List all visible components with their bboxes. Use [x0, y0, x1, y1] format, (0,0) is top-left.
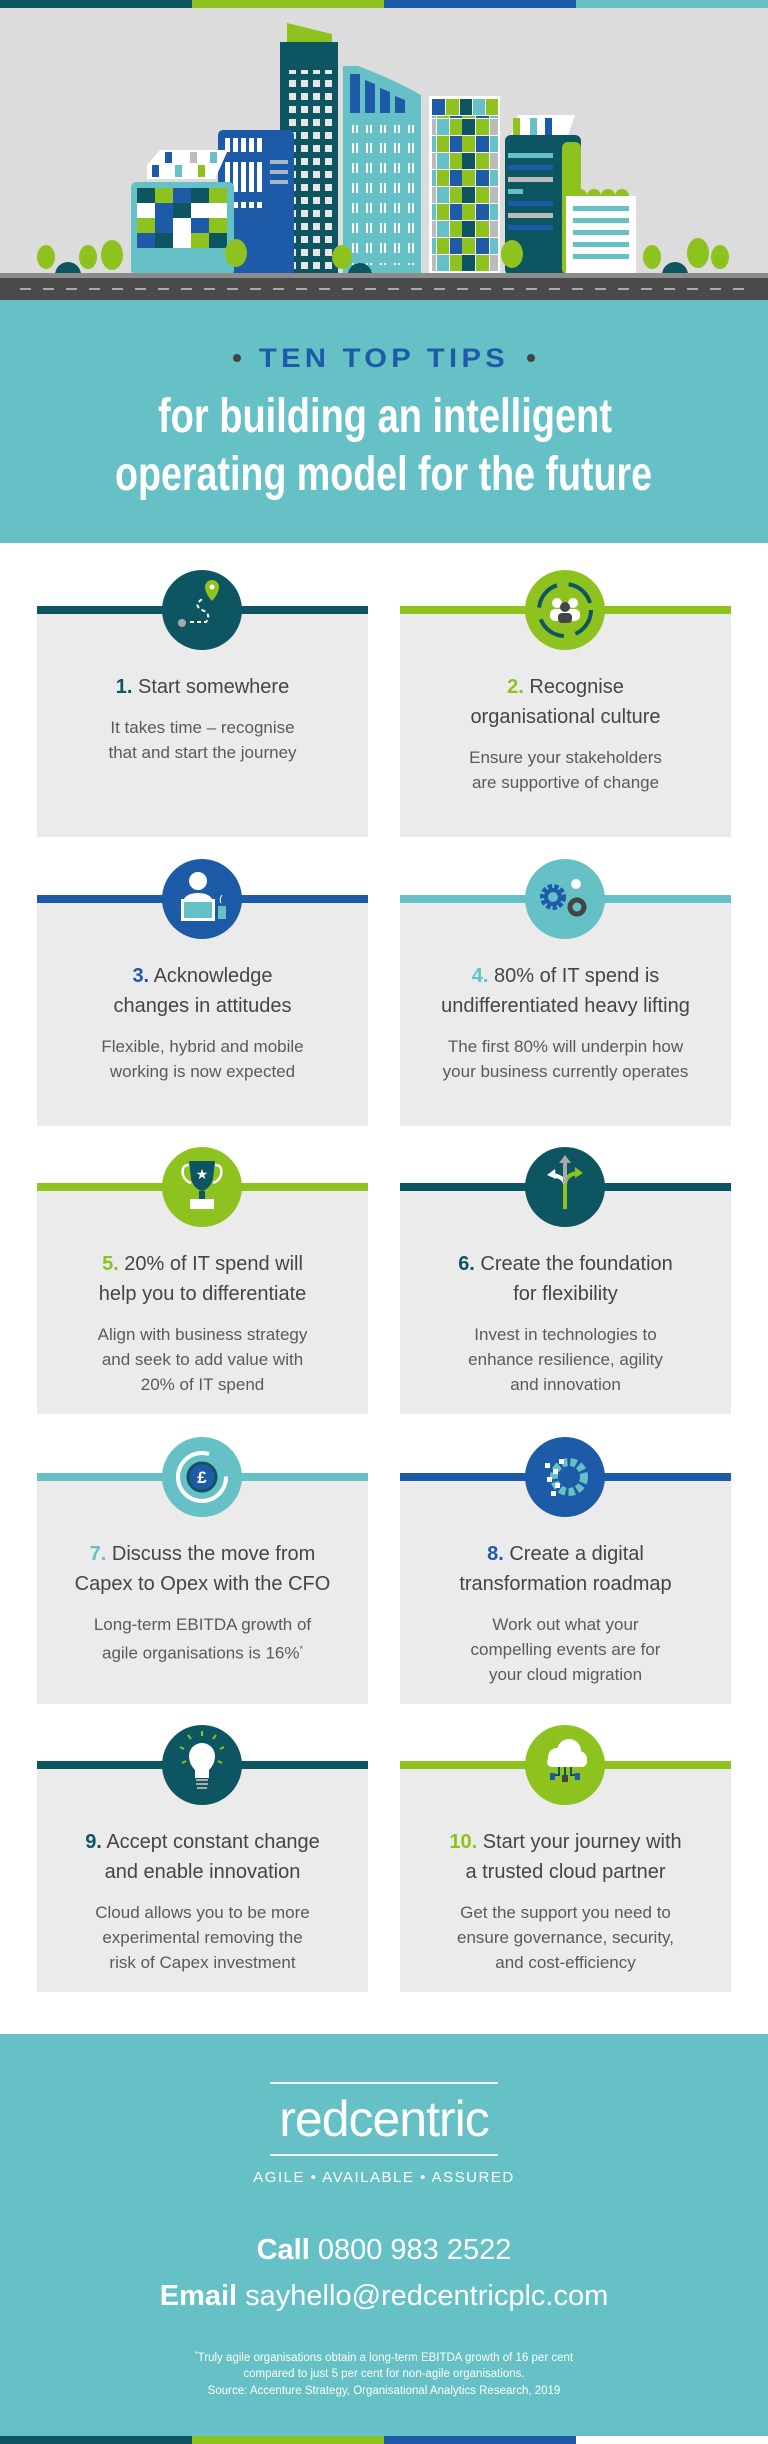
text: 7. Discuss the move from — [90, 1543, 315, 1565]
text: risk of Capex investment — [109, 1953, 296, 1972]
contact details — [160, 2234, 608, 2312]
tip 10 — [400, 1725, 731, 1992]
tip 8 — [400, 1437, 731, 1704]
text: organisational culture — [470, 706, 661, 728]
icon: journey pin — [162, 570, 242, 650]
text: The first 80% will underpin how — [448, 1037, 683, 1056]
tip 2 — [400, 570, 731, 837]
text: 3. Acknowledge — [132, 965, 273, 987]
main title: for building an intelligent — [158, 390, 612, 443]
tip 7 — [37, 1437, 368, 1704]
top colour stripes — [0, 0, 768, 8]
green top — [287, 23, 332, 57]
tip 6 — [400, 1147, 731, 1414]
footnote — [195, 2351, 573, 2397]
logo: redcentric: redcentric — [279, 2091, 489, 2147]
tip 4 — [400, 859, 731, 1126]
text: It takes time – recognise — [110, 718, 295, 737]
text: and enable innovation — [105, 1861, 300, 1883]
icon: light bulb — [162, 1725, 242, 1805]
text: Get the support you need to — [460, 1903, 671, 1922]
tip 3 — [37, 859, 368, 1126]
footnote: *Truly agile organisations obtain a long-term EBITDA growth of 16 per cent — [195, 2351, 573, 2364]
text: experimental removing the — [102, 1928, 303, 1947]
text: Long-term EBITDA growth of — [94, 1615, 311, 1634]
text: for flexibility — [513, 1283, 618, 1305]
text: Flexible, hybrid and mobile — [101, 1037, 304, 1056]
text: 10. Start your journey with — [449, 1831, 682, 1853]
text: Align with business strategy — [98, 1325, 307, 1344]
text: Invest in technologies to — [474, 1325, 657, 1344]
city skyline illustration — [0, 8, 768, 300]
icon: forked arrows — [525, 1147, 605, 1227]
icon: trophy — [162, 1147, 242, 1227]
subtitle: ten top tips: TEN TOP TIPS — [259, 343, 509, 373]
tip 5 — [37, 1147, 368, 1414]
icon: digital gear — [525, 1437, 605, 1517]
tip 9 — [37, 1725, 368, 1992]
footnote: compared to just 5 per cent for non-agile organisations. — [243, 2368, 525, 2380]
text: and seek to add value with — [102, 1350, 303, 1369]
tagline: AGILE • AVAILABLE • ASSURED — [253, 2169, 515, 2186]
text: a trusted cloud partner — [465, 1861, 666, 1883]
title banner — [0, 300, 768, 543]
icon: gears — [525, 859, 605, 939]
text: and cost-efficiency — [495, 1953, 636, 1972]
text: 20% of IT spend — [141, 1375, 264, 1394]
icon: people cycle — [525, 570, 605, 650]
trees — [37, 238, 729, 270]
text: 6. Create the foundation — [458, 1253, 673, 1275]
contact details: Email sayhello@redcentricplc.com — [160, 2280, 608, 2312]
icon: pound cycle: £ — [197, 1468, 207, 1487]
main title — [115, 390, 652, 501]
tip 1 — [37, 570, 368, 837]
text: your cloud migration — [489, 1665, 642, 1684]
icon: trophy: ★ — [196, 1166, 208, 1182]
text: enhance resilience, agility — [468, 1350, 663, 1369]
text: working is now expected — [110, 1062, 295, 1081]
text: Cloud allows you to be more — [95, 1903, 310, 1922]
text: that and start the journey — [108, 743, 297, 762]
text: transformation roadmap — [459, 1573, 672, 1595]
text: and innovation — [510, 1375, 621, 1394]
icon: remote worker — [162, 859, 242, 939]
icon: cloud network — [525, 1725, 605, 1805]
text: are supportive of change — [472, 773, 659, 792]
text: ensure governance, security, — [457, 1928, 674, 1947]
text: agile organisations is 16%* — [102, 1644, 303, 1663]
text: 2. Recognise — [507, 676, 624, 698]
footer panel — [0, 2034, 768, 2436]
text: undifferentiated heavy lifting — [441, 995, 690, 1017]
text: 9. Accept constant change — [85, 1831, 320, 1853]
footnote: Source: Accenture Strategy, Organisational Analytics Research, 2019 — [208, 2385, 560, 2397]
text: Ensure your stakeholders — [469, 748, 662, 767]
contact details: Call 0800 983 2522 — [257, 2234, 511, 2266]
text: changes in attitudes — [114, 995, 291, 1017]
text: your business currently operates — [443, 1062, 688, 1081]
text: 8. Create a digital — [487, 1543, 644, 1565]
icon: pound cycle — [162, 1437, 242, 1517]
text: 1. Start somewhere — [116, 676, 289, 698]
text: help you to differentiate — [99, 1283, 306, 1305]
text: Work out what your — [492, 1615, 639, 1634]
text: Capex to Opex with the CFO — [75, 1573, 330, 1595]
bottom colour stripes — [0, 2436, 768, 2444]
text: 4. 80% of IT spend is — [472, 965, 659, 987]
text: 5. 20% of IT spend will — [102, 1253, 303, 1275]
text: compelling events are for — [471, 1640, 660, 1659]
